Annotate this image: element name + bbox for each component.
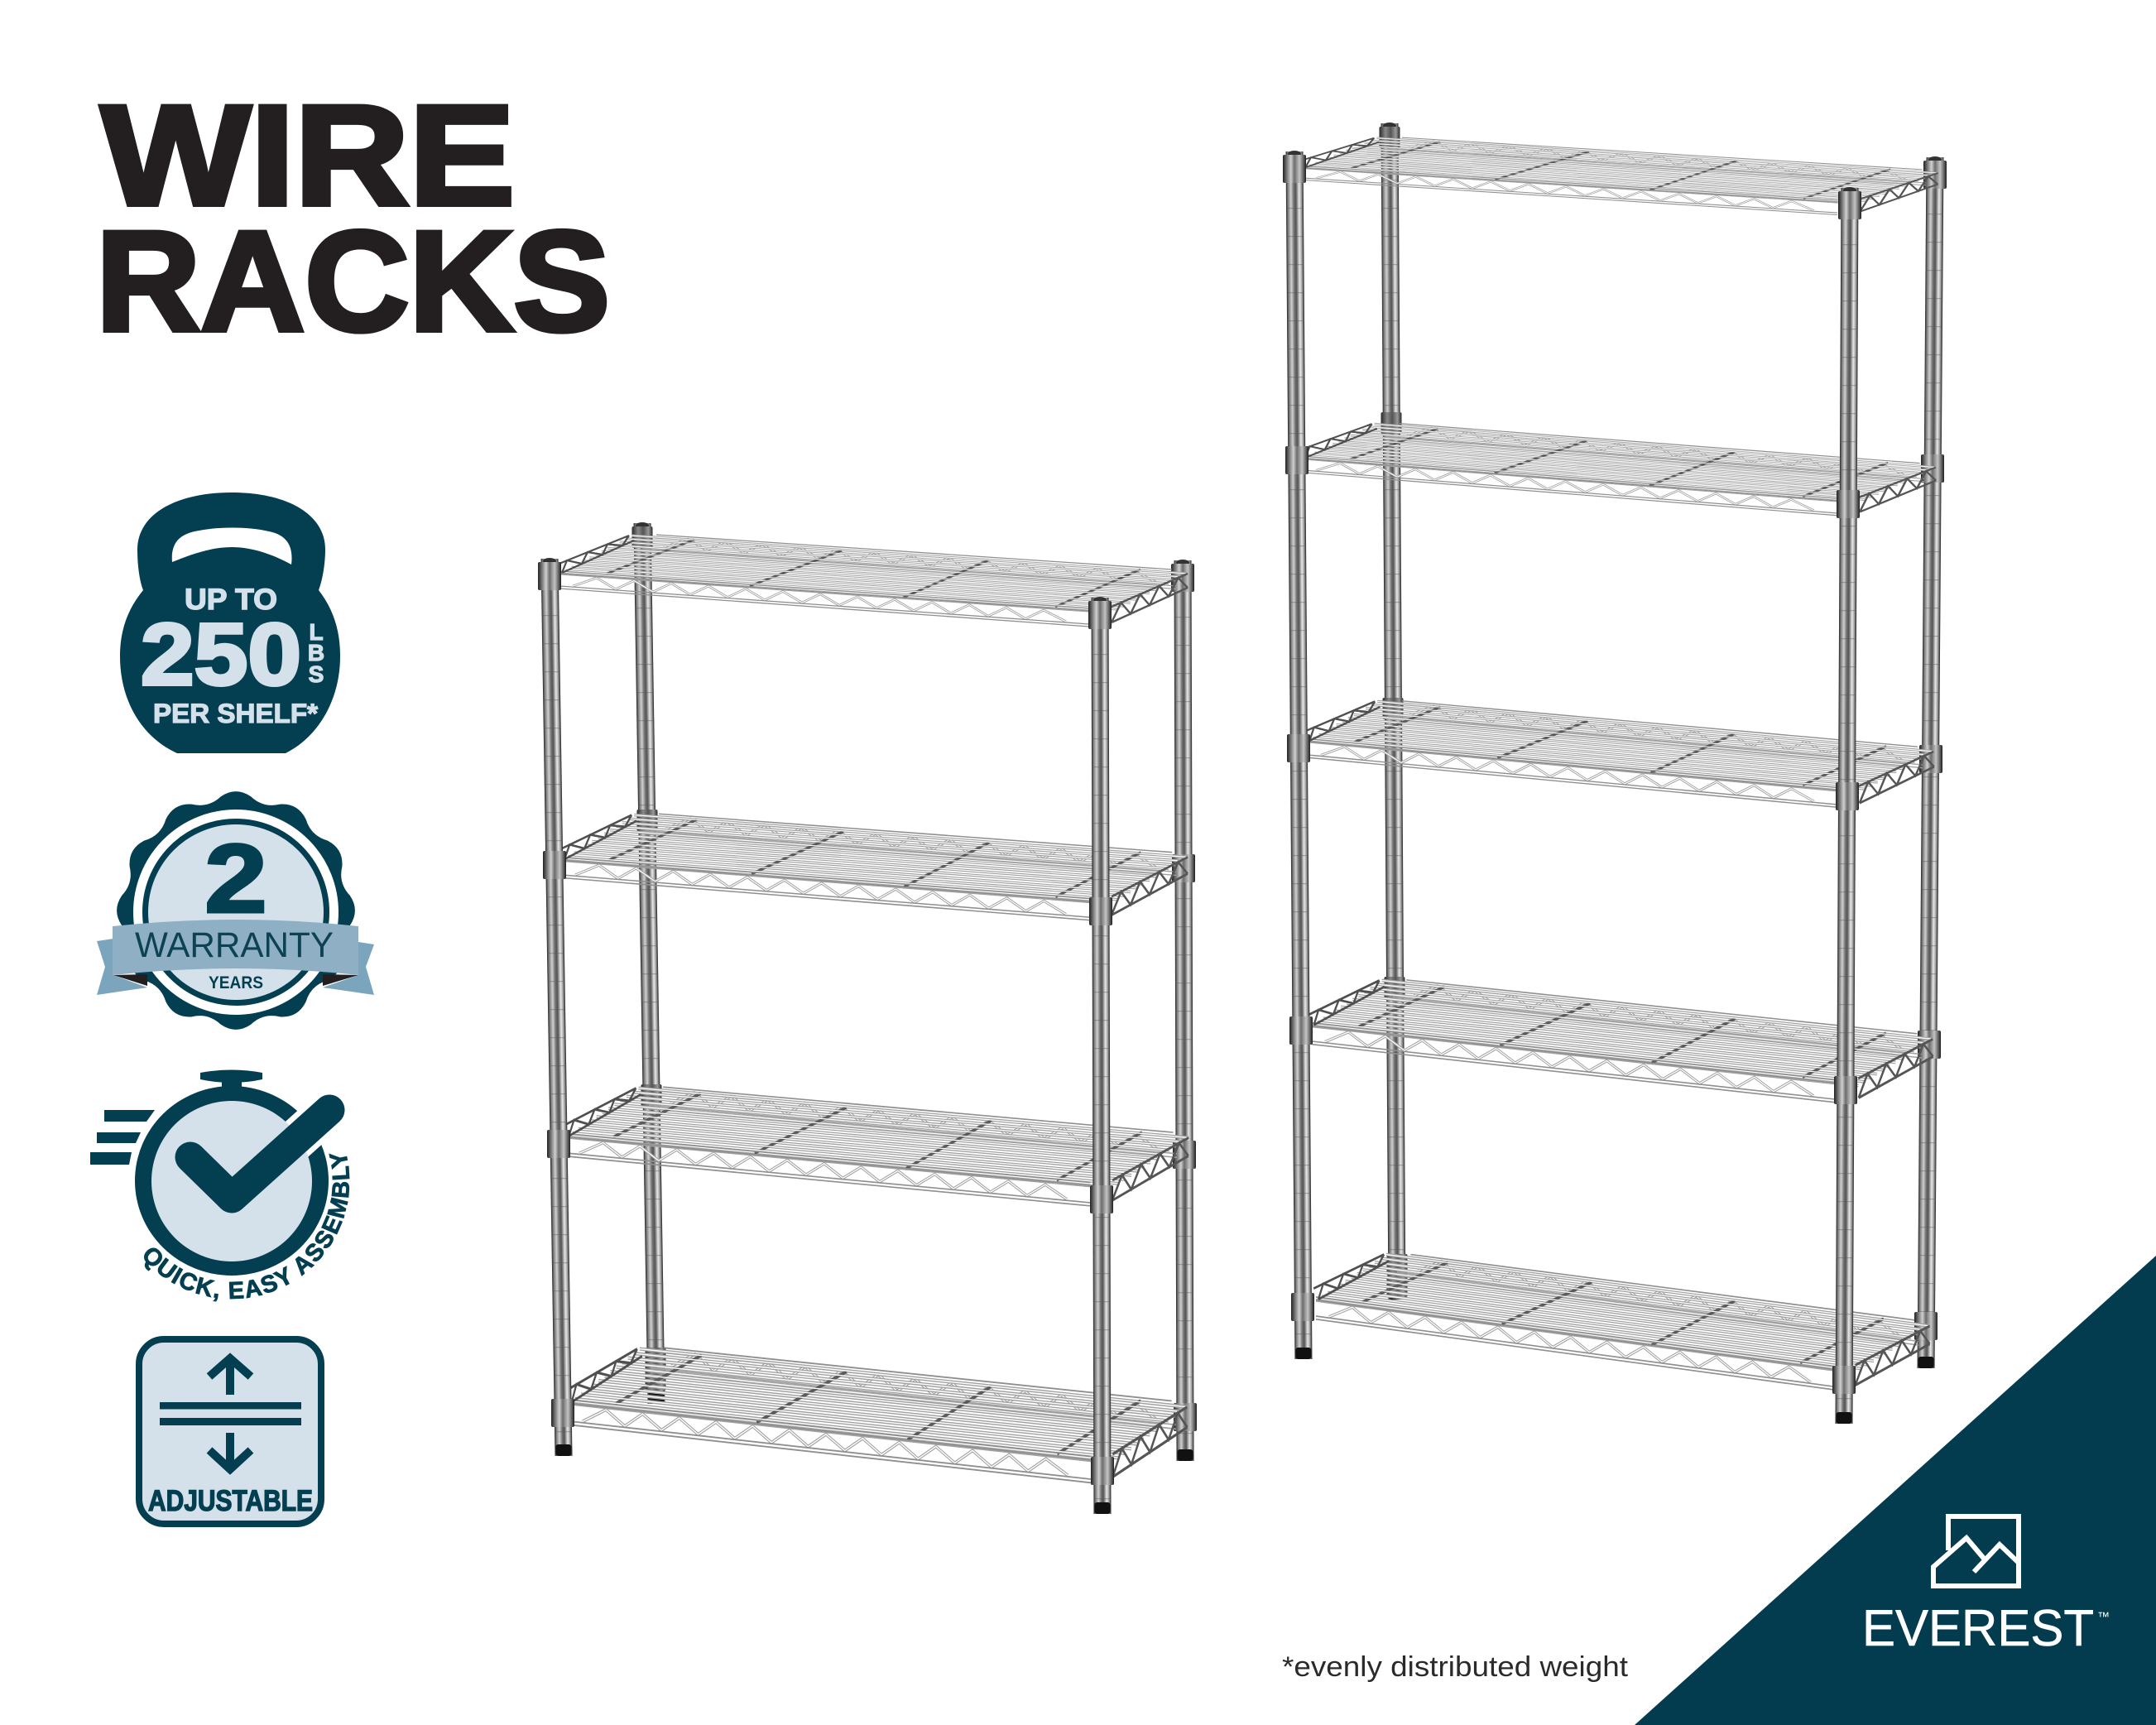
front posts	[1283, 151, 1861, 1424]
product: 5-tier wire rack	[1283, 123, 1947, 1424]
icon: warranty badge: YEARS	[209, 973, 263, 992]
corner triangle background	[1635, 1256, 2156, 1725]
title: WIRE	[101, 76, 515, 235]
icon: kettlebell capacity badge: B	[308, 640, 324, 665]
icon: adjustable shelf	[139, 1339, 321, 1524]
icon: kettlebell capacity badge: UP TO	[185, 584, 277, 616]
icon: warranty badge: 2	[204, 824, 267, 934]
front posts	[538, 558, 1114, 1514]
brand name: ™	[2097, 1610, 2110, 1624]
icon: quick assembly stopwatch	[90, 1069, 349, 1301]
product: 4-tier wire rack	[538, 522, 1197, 1514]
icon: kettlebell capacity badge: S	[309, 661, 324, 687]
rear posts	[1379, 123, 1947, 1368]
icon: quick assembly stopwatch: QUICK, EASY ASSEMBLY	[144, 1154, 349, 1301]
icon: kettlebell capacity badge: L	[309, 619, 324, 645]
icon: Everest logo mark	[1933, 1516, 2019, 1586]
icon: kettlebell capacity badge: 250	[141, 606, 301, 704]
icon: adjustable shelf: ADJUSTABLE	[148, 1485, 313, 1517]
rear posts	[632, 522, 1197, 1461]
title: RACKS	[96, 202, 610, 361]
shelf 1	[1299, 137, 1939, 215]
shelf 5	[1313, 1251, 1930, 1394]
shelf 2	[1299, 422, 1937, 517]
icon: kettlebell capacity badge	[120, 493, 340, 753]
footnote: *evenly distributed weight	[1282, 1651, 1629, 1683]
shelf 2	[559, 811, 1188, 923]
icon: warranty badge	[97, 791, 374, 1030]
icon: warranty badge: WARRANTY	[135, 925, 334, 965]
shelf 1	[557, 535, 1188, 627]
brand name: EVEREST	[1862, 1600, 2094, 1657]
shelf 3	[563, 1087, 1189, 1206]
shelf 4	[1308, 978, 1934, 1104]
icon: kettlebell capacity badge: PER SHELF*	[153, 699, 319, 728]
shelf 3	[1303, 699, 1936, 809]
shelf 4	[566, 1348, 1188, 1483]
title	[96, 76, 610, 361]
